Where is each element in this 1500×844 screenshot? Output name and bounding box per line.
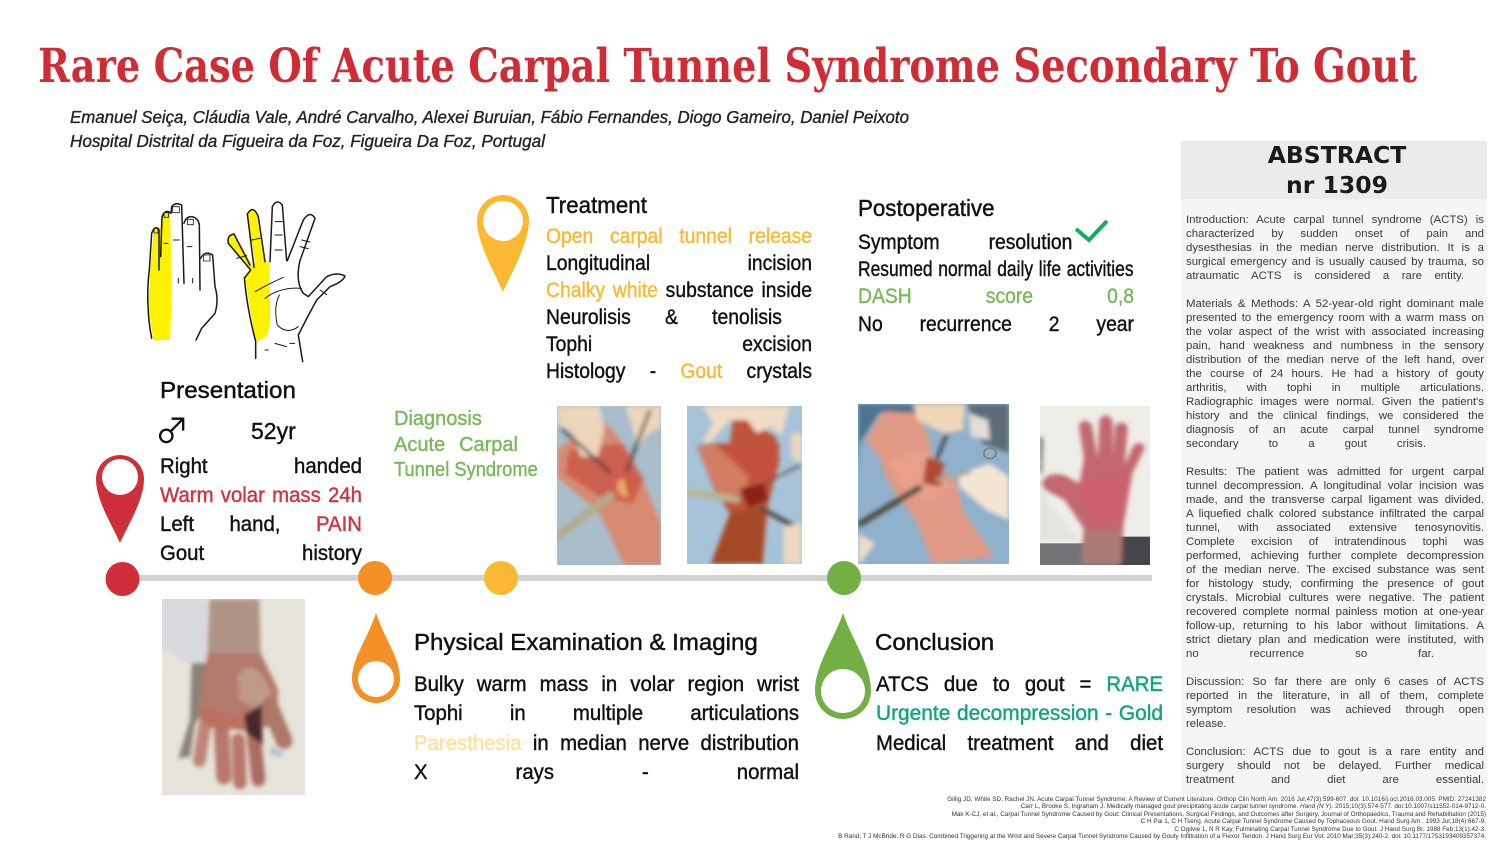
abstract body text: Materials & Methods: A 52-year-old right dominant male [1186,298,1484,310]
panel: postoperative [858,195,1134,336]
male symbol and age: 52yr [251,418,296,444]
abstract body text: Results: The patient was admitted for urgent carpal [1186,466,1484,478]
presentation details: Left hand, PAIN [160,513,362,536]
treatment steps [546,224,812,383]
panel: diagnosis: Diagnosis [394,408,482,430]
abstract body text: treatment and diet are essential. [1186,774,1484,786]
abstract body text: dysesthesias in the median nerve distribution. It is a [1186,242,1484,254]
panel: diagnosis: Tunnel Syndrome [394,459,538,481]
abstract body text: the volar aspect of the wrist with associated increasing [1186,326,1484,338]
treatment steps: Open carpal tunnel release [546,224,812,248]
authors and affiliation: Emanuel Seiça, Cláudia Vale, André Carvalho, Alexei Buruian, Fábio Fernandes, Diogo Gameiro, Daniel Peixoto [70,107,909,127]
presentation details: Warm volar mass 24h [160,484,362,507]
abstract body text: Complete excision of intratendinous tophi was [1186,536,1484,548]
presentation details: Right handed [160,454,362,478]
abstract body text: strict dietary plan and medication were instituted, with [1186,634,1484,646]
abstract header: nr 1309 [1286,171,1388,199]
presentation details [160,454,362,565]
abstract body text: diagnosis of an acute carpal tunnel syndrome [1186,424,1484,436]
references: B Rand, T J McBride, R G Dias. Combined Triggering at the Wrist and Severe Carpal Tunnel Syndrome Caused by Gouty Infiltration of a Flexor Tendon. J Hand Surg Eur Vol. 2010 Mar;35(3):240-2. doi: 10.1177/1753193409357374. [838,833,1486,840]
panel: physical examination and imaging [414,629,800,784]
references [838,796,1486,840]
examination findings: Paresthesia in median nerve distribution [414,732,799,754]
abstract body text: arthritis, with tophi in multiple articulations. [1186,382,1484,394]
authors and affiliation: Hospital Distrital da Figueira da Foz, Figueira Da Foz, Portugal [70,131,546,151]
abstract body text: presented to the emergency room with a warm mass on [1186,312,1484,324]
photo: surgery tophi excision [687,406,802,564]
abstract body text [1186,214,1484,786]
references: Carr L, Brooke S, Ingraham J. Medically managed gout precipitating acute carpal tunnel syndrome. Hand (N Y). 2015;10(3):574-577. doi:10.1007/s11552-014-9712-0. [1021,803,1486,810]
references: C H Pai 1, C H Tseng. Acute Carpal Tunnel Syndrome Caused by Tophaceous Gout. Hand Surg Am . 1993 Jul;18(4):667-9. [1141,818,1486,825]
references: Mak K-CJ, et al., Carpal Tunnel Syndrome Caused by Gout: Clinical Presentations, Surgical Findings, and Outcomes after Surgery, Journal of Orthopaedics, Trauma and Rehabilitation (2015) [952,811,1486,818]
panel: abstract [1181,141,1487,797]
icon: hands with median nerve distribution [147,201,346,362]
photo: swollen wrist [162,599,305,795]
abstract body text: tunnel decompression. A longitudinal volar incision was [1186,480,1484,492]
abstract body text: tunnel, with associated extensive tenosynovitis. [1186,522,1484,534]
heading: presentation: Presentation [160,377,296,403]
abstract header [1181,141,1487,199]
panel: diagnosis: Acute Carpal [394,434,518,456]
treatment steps: Tophi excision [546,333,812,356]
panel: diagnosis [394,408,538,481]
abstract body text: secondary to a gout crisis. [1186,438,1426,450]
treatment steps: Neurolisis & tenolisis [546,306,782,329]
abstract body text: surgical emergency and is usually caused by trauma, so [1186,256,1484,268]
treatment steps: Histology - Gout crystals [546,360,812,383]
conclusion statements: Urgente decompression - Gold [876,702,1163,725]
postoperative outcomes: DASH score 0,8 [858,285,1134,308]
abstract body text: surgery should not be delayed. Further medical [1186,760,1484,772]
treatment steps: Longitudinal incision [546,252,812,275]
references: C Ogilvie 1, N R Kay. Fulminating Carpal Tunnel Syndrome Due to Gout. J Hand Surg Br. 1988 Feb;13(1):42-3. [1174,826,1486,833]
abstract body text: characterized by sudden onset of pain and [1186,228,1484,240]
heading: physical examination: Physical Examination & Imaging [414,629,758,655]
postoperative outcomes: No recurrence 2 year [858,313,1134,336]
abstract body text: of the median nerve. The excised substance was sent [1186,564,1484,576]
conclusion statements [876,672,1164,754]
abstract body text: for histology study, confirming the presence of gout [1186,578,1484,590]
references: Gillig JD, White SD, Rachel JN. Acute Carpal Tunnel Syndrome: A Review of Current Literature. Orthop Clin North Am. 2016 Jul;47(3):599-607. doi: 10.1016/j.ocl.2016.03.005. PMID: 27241382 [947,796,1486,803]
conclusion statements: Medical treatment and diet [876,732,1163,754]
authors and affiliation [70,107,909,151]
examination findings: Bulky warm mass in volar region wrist [414,672,799,696]
heading: treatment: Treatment [546,192,647,218]
abstract body text: release. [1186,718,1227,730]
abstract body text: A liquefied chalk colored substance infiltrated the carpal [1186,508,1484,520]
icon: check mark [1074,220,1108,243]
icon: orange drop [352,613,400,703]
male symbol and age [155,404,296,453]
abstract body text: crystals. Microbial cultures were negative. The patient [1186,592,1484,604]
presentation details: Gout history [160,542,362,565]
panel: treatment [546,192,812,383]
abstract body text: Conclusion: ACTS due to gout is a rare entity and [1186,746,1484,758]
examination findings: Tophi in multiple articulations [414,702,799,725]
icon: red map pin [96,455,144,543]
abstract body text: history and the clinical findings, we considered the [1186,410,1484,422]
photo: healed hand [1040,406,1150,565]
abstract body text: performed, achieving further complete decompression [1186,550,1484,562]
abstract body text: distribution of the median nerve of the left hand, over [1186,354,1484,366]
examination findings [414,672,800,784]
abstract body text: follow-up, returning to his labor without limitations. A [1186,620,1484,632]
abstract body text: reported in the literature, in all of them, complete [1186,690,1484,702]
postoperative outcomes: Resumed normal daily life activities [858,258,1134,281]
treatment steps: Chalky white substance inside [546,279,812,302]
photo: surgery retraction [858,404,1009,564]
abstract body text: Discussion: So far there are only 6 cases of ACTS [1186,676,1484,688]
panel: conclusion [875,629,1164,754]
abstract body text: Introduction: Acute carpal tunnel syndrome (ACTS) is [1186,214,1484,226]
abstract body text: recovered complete normal painless motion at one-year [1186,606,1484,618]
icon: green drop [815,613,871,719]
conclusion statements: ATCS due to gout = RARE [876,672,1163,696]
abstract header: ABSTRACT [1268,141,1406,169]
abstract body text: the course of 24 hours. He had a history of gouty [1186,368,1484,380]
postoperative outcomes: Symptom resolution [858,230,1072,254]
panel: presentation [155,377,362,565]
heading: postoperative: Postoperative [858,195,995,221]
abstract body text: atraumatic ACTS is considered a rare entity. [1186,270,1464,282]
abstract body text: Radiographic images were normal. Given the patient's [1186,396,1484,408]
photo: surgery incision [557,406,661,565]
abstract body text: symptom resolution was achieved through open [1186,704,1484,716]
abstract body text: pain, hand weakness and numbness in the sensory [1186,340,1484,352]
heading: conclusion: Conclusion [875,629,994,655]
examination findings: X rays - normal [414,761,799,784]
icon: yellow map pin [477,195,529,292]
timeline [106,561,1152,596]
abstract body text: no recurrence so far. [1186,648,1434,660]
male symbol and age: ♂ [155,404,189,453]
abstract body text: made, and the transverse carpal ligament was divided. [1186,494,1484,506]
postoperative outcomes [858,230,1134,336]
